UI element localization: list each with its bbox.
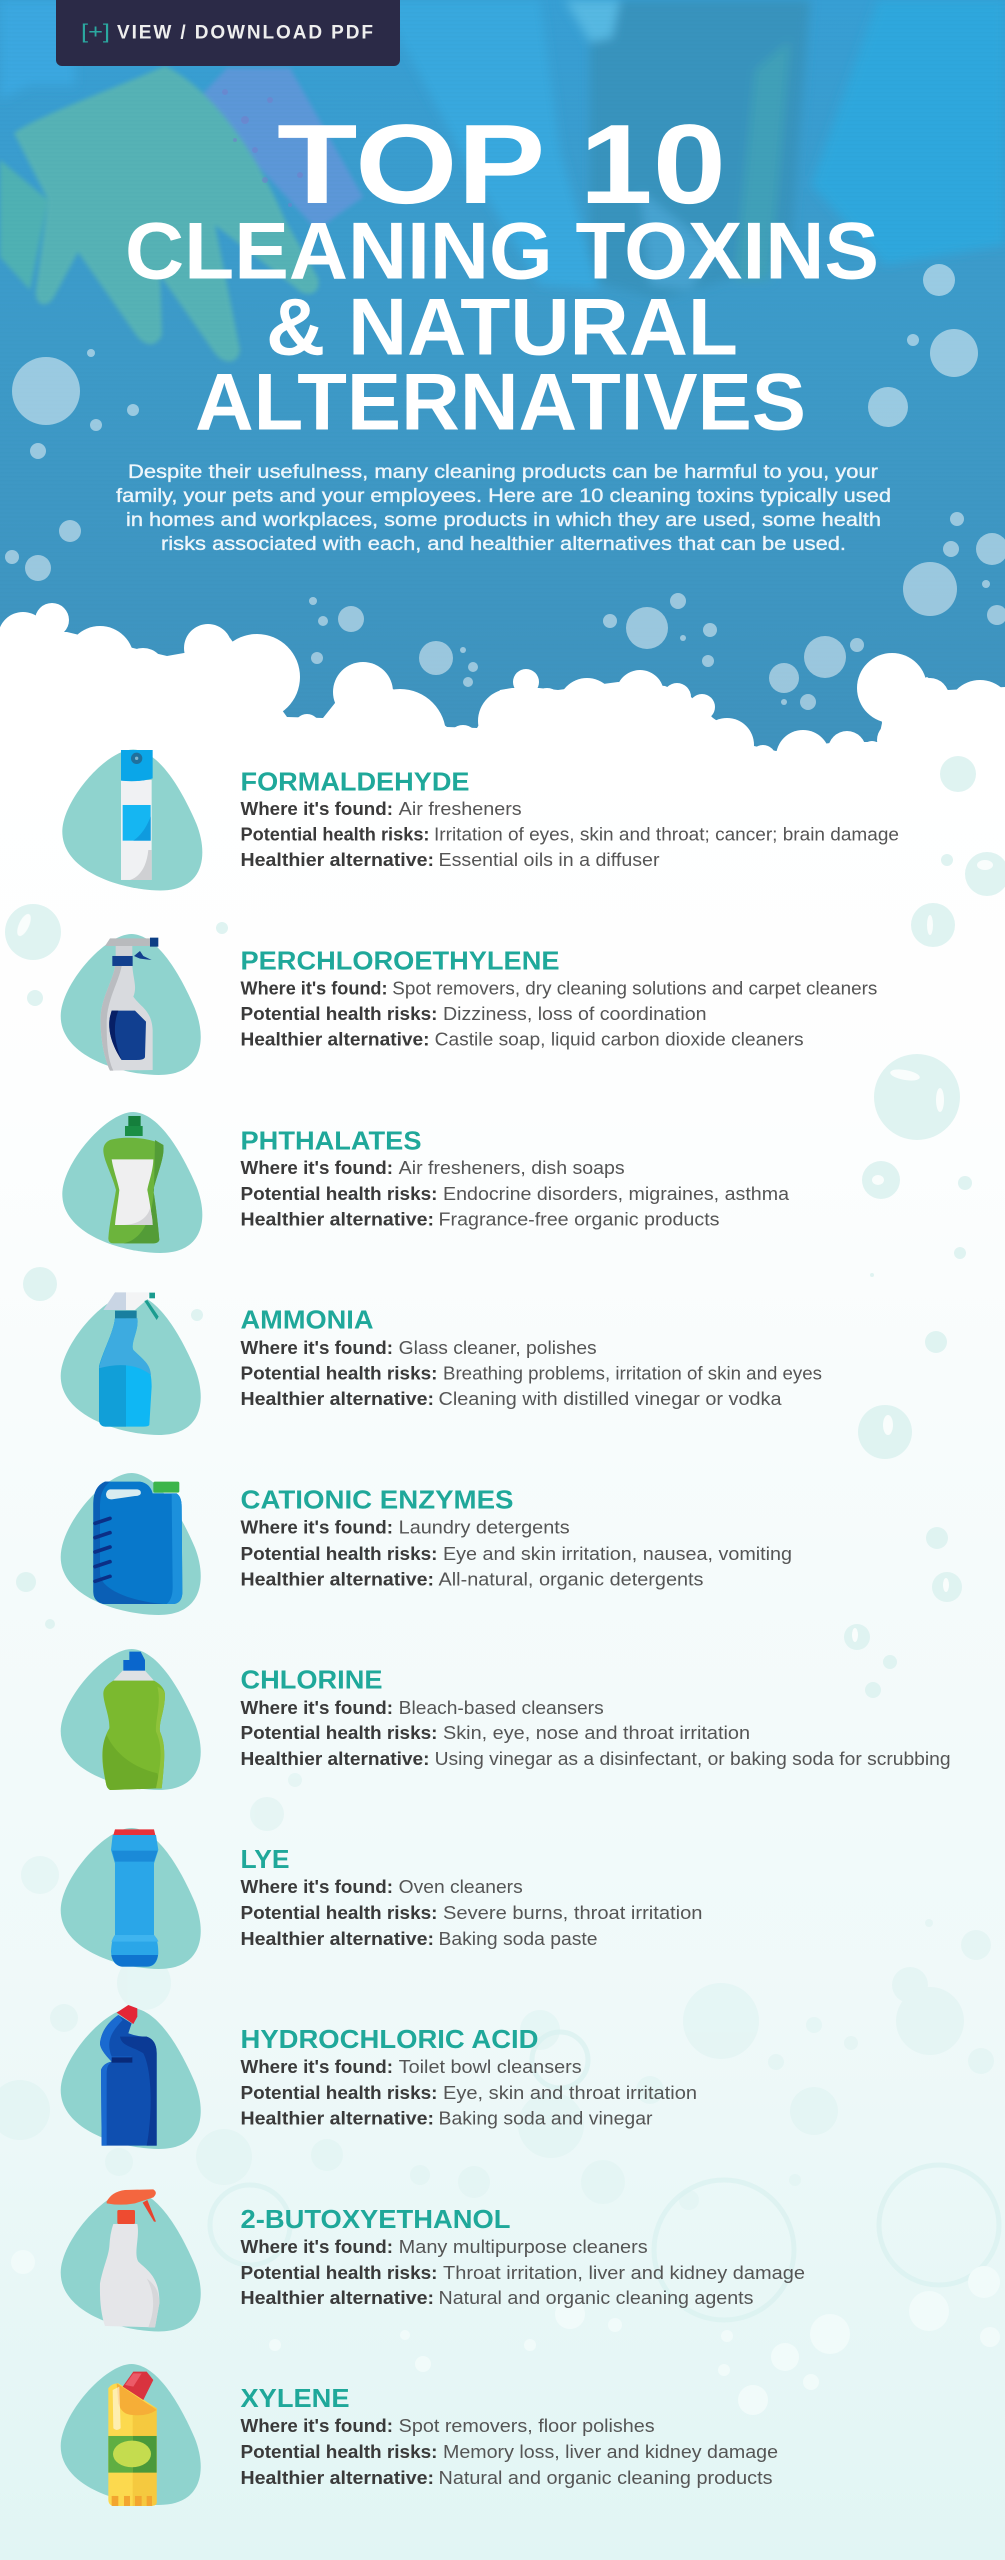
item 8: hydrochloric acid	[61, 2005, 697, 2149]
details: Spot removers, floor polishes	[399, 2416, 655, 2436]
details: Breathing problems, irritation of skin and eyes	[443, 1364, 822, 1384]
details: Where it's found:	[240, 1877, 393, 1897]
details: Severe burns, throat irritation	[443, 1903, 702, 1923]
details: Essential oils in a diffuser	[438, 850, 660, 870]
title: & NATURAL	[266, 282, 738, 372]
icon blob	[61, 1649, 201, 1790]
details: Healthier alternative:	[240, 1749, 430, 1769]
item 5: cationic enzymes	[61, 1473, 792, 1615]
details: Where it's found:	[240, 2057, 393, 2077]
details: Potential health risks:	[240, 2083, 438, 2103]
details: Dizziness, loss of coordination	[443, 1004, 706, 1024]
icon: yellow bottle	[108, 2372, 157, 2506]
details: Using vinegar as a disinfectant, or baking soda for scrubbing	[435, 1749, 951, 1769]
item 6: chlorine	[61, 1649, 951, 1790]
intro paragraph: in homes and workplaces, some products in which they are used, some health	[126, 510, 881, 531]
details: Where it's found:	[240, 799, 393, 819]
details: Memory loss, liver and kidney damage	[443, 2442, 778, 2462]
icon: green dish soap	[103, 1116, 164, 1243]
title	[125, 101, 879, 448]
details: Healthier alternative:	[240, 1570, 434, 1590]
details: Skin, eye, nose and throat irritation	[443, 1723, 750, 1743]
foam edge	[0, 603, 1005, 784]
details: Where it's found:	[240, 1158, 393, 1178]
details	[240, 799, 899, 870]
details: Where it's found:	[240, 1338, 393, 1358]
details: Laundry detergents	[399, 1518, 570, 1538]
decorative body bubbles	[5, 756, 1005, 1698]
details: Potential health risks:	[240, 1723, 438, 1743]
details: Potential health risks:	[240, 2263, 438, 2283]
icon blob	[61, 1294, 201, 1435]
details	[240, 2416, 778, 2488]
details: Potential health risks:	[240, 1004, 438, 1024]
details: Oven cleaners	[399, 1877, 523, 1897]
title: ALTERNATIVES	[195, 358, 806, 448]
details: All-natural, organic detergents	[438, 1570, 704, 1590]
item 1: formaldehyde	[62, 750, 899, 890]
details: Eye and skin irritation, nausea, vomiting	[443, 1544, 792, 1564]
details: Baking soda and vinegar	[438, 2108, 653, 2128]
item 4: ammonia	[61, 1292, 822, 1435]
details: Baking soda paste	[438, 1929, 598, 1949]
details: Healthier alternative:	[240, 2468, 434, 2488]
details: Bleach-based cleansers	[399, 1698, 604, 1718]
icon: white spray bottle	[100, 2189, 159, 2327]
details: Where it's found:	[240, 1698, 393, 1718]
intro paragraph	[116, 462, 891, 555]
button: view / download PDF	[56, 0, 400, 66]
icon blob	[61, 2008, 201, 2149]
details: Toilet bowl cleansers	[399, 2057, 582, 2077]
item 7: lye	[61, 1828, 702, 1969]
details	[240, 1698, 951, 1769]
details: Natural and organic cleaning products	[438, 2468, 772, 2488]
details	[240, 1338, 822, 1409]
icon blob	[62, 1112, 202, 1253]
icon: oven cleaner tube	[111, 1829, 158, 1967]
icon: detergent jug	[93, 1482, 182, 1604]
icon blob	[61, 2364, 201, 2505]
heading: PHTHALATES	[240, 1126, 422, 1156]
icon: spray bottle navy	[101, 938, 158, 1071]
details: Potential health risks:	[240, 2442, 438, 2462]
details: Where it's found:	[240, 2237, 393, 2257]
title: CLEANING TOXINS	[125, 206, 879, 296]
details	[240, 1518, 792, 1590]
details: Spot removers, dry cleaning solutions and carpet cleaners	[392, 978, 877, 998]
details: Air fresheners, dish soaps	[399, 1158, 625, 1178]
details: Potential health risks:	[240, 1364, 438, 1384]
details: Where it's found:	[240, 978, 388, 998]
hero photo background	[0, 0, 1005, 770]
button: view / download PDF: VIEW / DOWNLOAD PDF	[117, 22, 374, 44]
details	[240, 1877, 702, 1949]
heading: CATIONIC ENZYMES	[240, 1484, 514, 1514]
details: Castile soap, liquid carbon dioxide cleaners	[435, 1030, 804, 1050]
details: Many multipurpose cleaners	[399, 2237, 648, 2257]
details: Healthier alternative:	[240, 1210, 434, 1230]
intro paragraph: risks associated with each, and healthier alternatives that can be used.	[161, 534, 846, 555]
details: Cleaning with distilled vinegar or vodka	[438, 1389, 783, 1409]
details: Potential health risks:	[240, 1903, 438, 1923]
heading: HYDROCHLORIC ACID	[240, 2024, 538, 2054]
details: Irritation of eyes, skin and throat; cancer; brain damage	[434, 824, 899, 844]
details: Healthier alternative:	[240, 2288, 434, 2308]
page background	[0, 740, 1005, 2560]
details	[240, 1158, 790, 1230]
details: Fragrance-free organic products	[438, 1210, 720, 1230]
details: Healthier alternative:	[240, 1389, 434, 1409]
intro paragraph: family, your pets and your employees. Here are 10 cleaning toxins typically used	[116, 486, 891, 507]
details: Eye, skin and throat irritation	[443, 2083, 697, 2103]
details: Healthier alternative:	[240, 1030, 430, 1050]
details: Throat irritation, liver and kidney damage	[443, 2263, 805, 2283]
icon: toilet cleaner bottle	[100, 2005, 157, 2146]
icon: aerosol can	[121, 750, 153, 880]
details: Healthier alternative:	[240, 1929, 434, 1949]
item 9: 2-butoxyethanol	[61, 2189, 805, 2332]
icon: blue spray bottle	[99, 1292, 159, 1427]
heading: PERCHLOROETHYLENE	[240, 946, 560, 976]
item 10: xylene	[61, 2364, 778, 2506]
item 2: perchloroethylene	[61, 934, 877, 1075]
heading: FORMALDEHYDE	[240, 766, 470, 796]
details: Healthier alternative:	[240, 2108, 434, 2128]
icon blob	[61, 2190, 201, 2332]
heading: LYE	[240, 1844, 290, 1874]
details	[240, 2237, 805, 2308]
icon blob	[61, 1828, 201, 1969]
icon blob	[62, 750, 202, 890]
title: TOP 10	[277, 101, 726, 227]
details: Where it's found:	[240, 1518, 393, 1538]
heading: CHLORINE	[240, 1664, 382, 1694]
details: Potential health risks:	[240, 824, 430, 844]
details	[240, 2057, 697, 2128]
details: Natural and organic cleaning agents	[438, 2288, 754, 2308]
heading: AMMONIA	[240, 1304, 374, 1334]
details: Glass cleaner, polishes	[399, 1338, 597, 1358]
details	[240, 978, 877, 1050]
details: Where it's found:	[240, 2416, 393, 2436]
icon blob	[61, 934, 201, 1075]
details: Healthier alternative:	[240, 850, 434, 870]
details: Air fresheners	[399, 799, 522, 819]
icon: green bleach bottle	[102, 1652, 165, 1790]
details: Endocrine disorders, migraines, asthma	[443, 1184, 790, 1204]
heading: XYLENE	[240, 2383, 350, 2413]
details: Potential health risks:	[240, 1544, 438, 1564]
intro paragraph: Despite their usefulness, many cleaning products can be harmful to you, your	[128, 462, 879, 483]
details: Potential health risks:	[240, 1184, 438, 1204]
decorative hero bubbles	[5, 264, 1005, 710]
icon blob	[61, 1473, 201, 1615]
button: view / download PDF: [+]	[81, 22, 110, 44]
heading: 2-BUTOXYETHANOL	[240, 2204, 511, 2234]
item 3: phthalates	[62, 1112, 790, 1253]
